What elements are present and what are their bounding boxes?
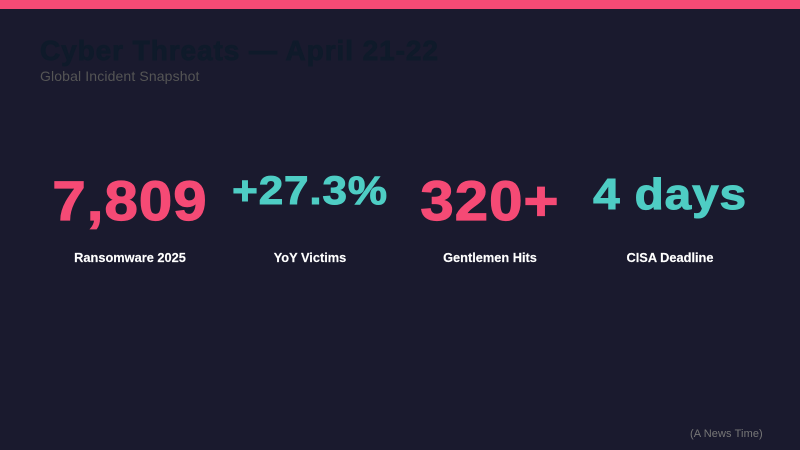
stat: YoY victims bbox=[232, 169, 388, 264]
subtitle: Global Incident Snapshot bbox=[40, 68, 200, 84]
source note: (A News Time) bbox=[690, 428, 763, 440]
label: Gentlemen Hits: Gentlemen Hits bbox=[443, 250, 537, 264]
label: Ransomware 2025: Ransomware 2025 bbox=[74, 250, 186, 264]
stat: CISA deadline bbox=[593, 170, 747, 264]
value: 4 days: 4 days bbox=[593, 170, 747, 219]
value: 7,809: 7,809 bbox=[52, 169, 208, 232]
label: CISA Deadline: CISA Deadline bbox=[626, 250, 714, 264]
label: YoY Victims: YoY Victims bbox=[274, 250, 346, 264]
value: 320+: 320+ bbox=[420, 169, 560, 232]
title: Cyber Threats — April 21-22 bbox=[40, 35, 439, 66]
stat: ransomware 2025 bbox=[52, 169, 208, 264]
value: +27.3%: +27.3% bbox=[232, 169, 388, 213]
top accent bar bbox=[0, 0, 800, 9]
stat: Gentlemen hits bbox=[420, 169, 560, 264]
